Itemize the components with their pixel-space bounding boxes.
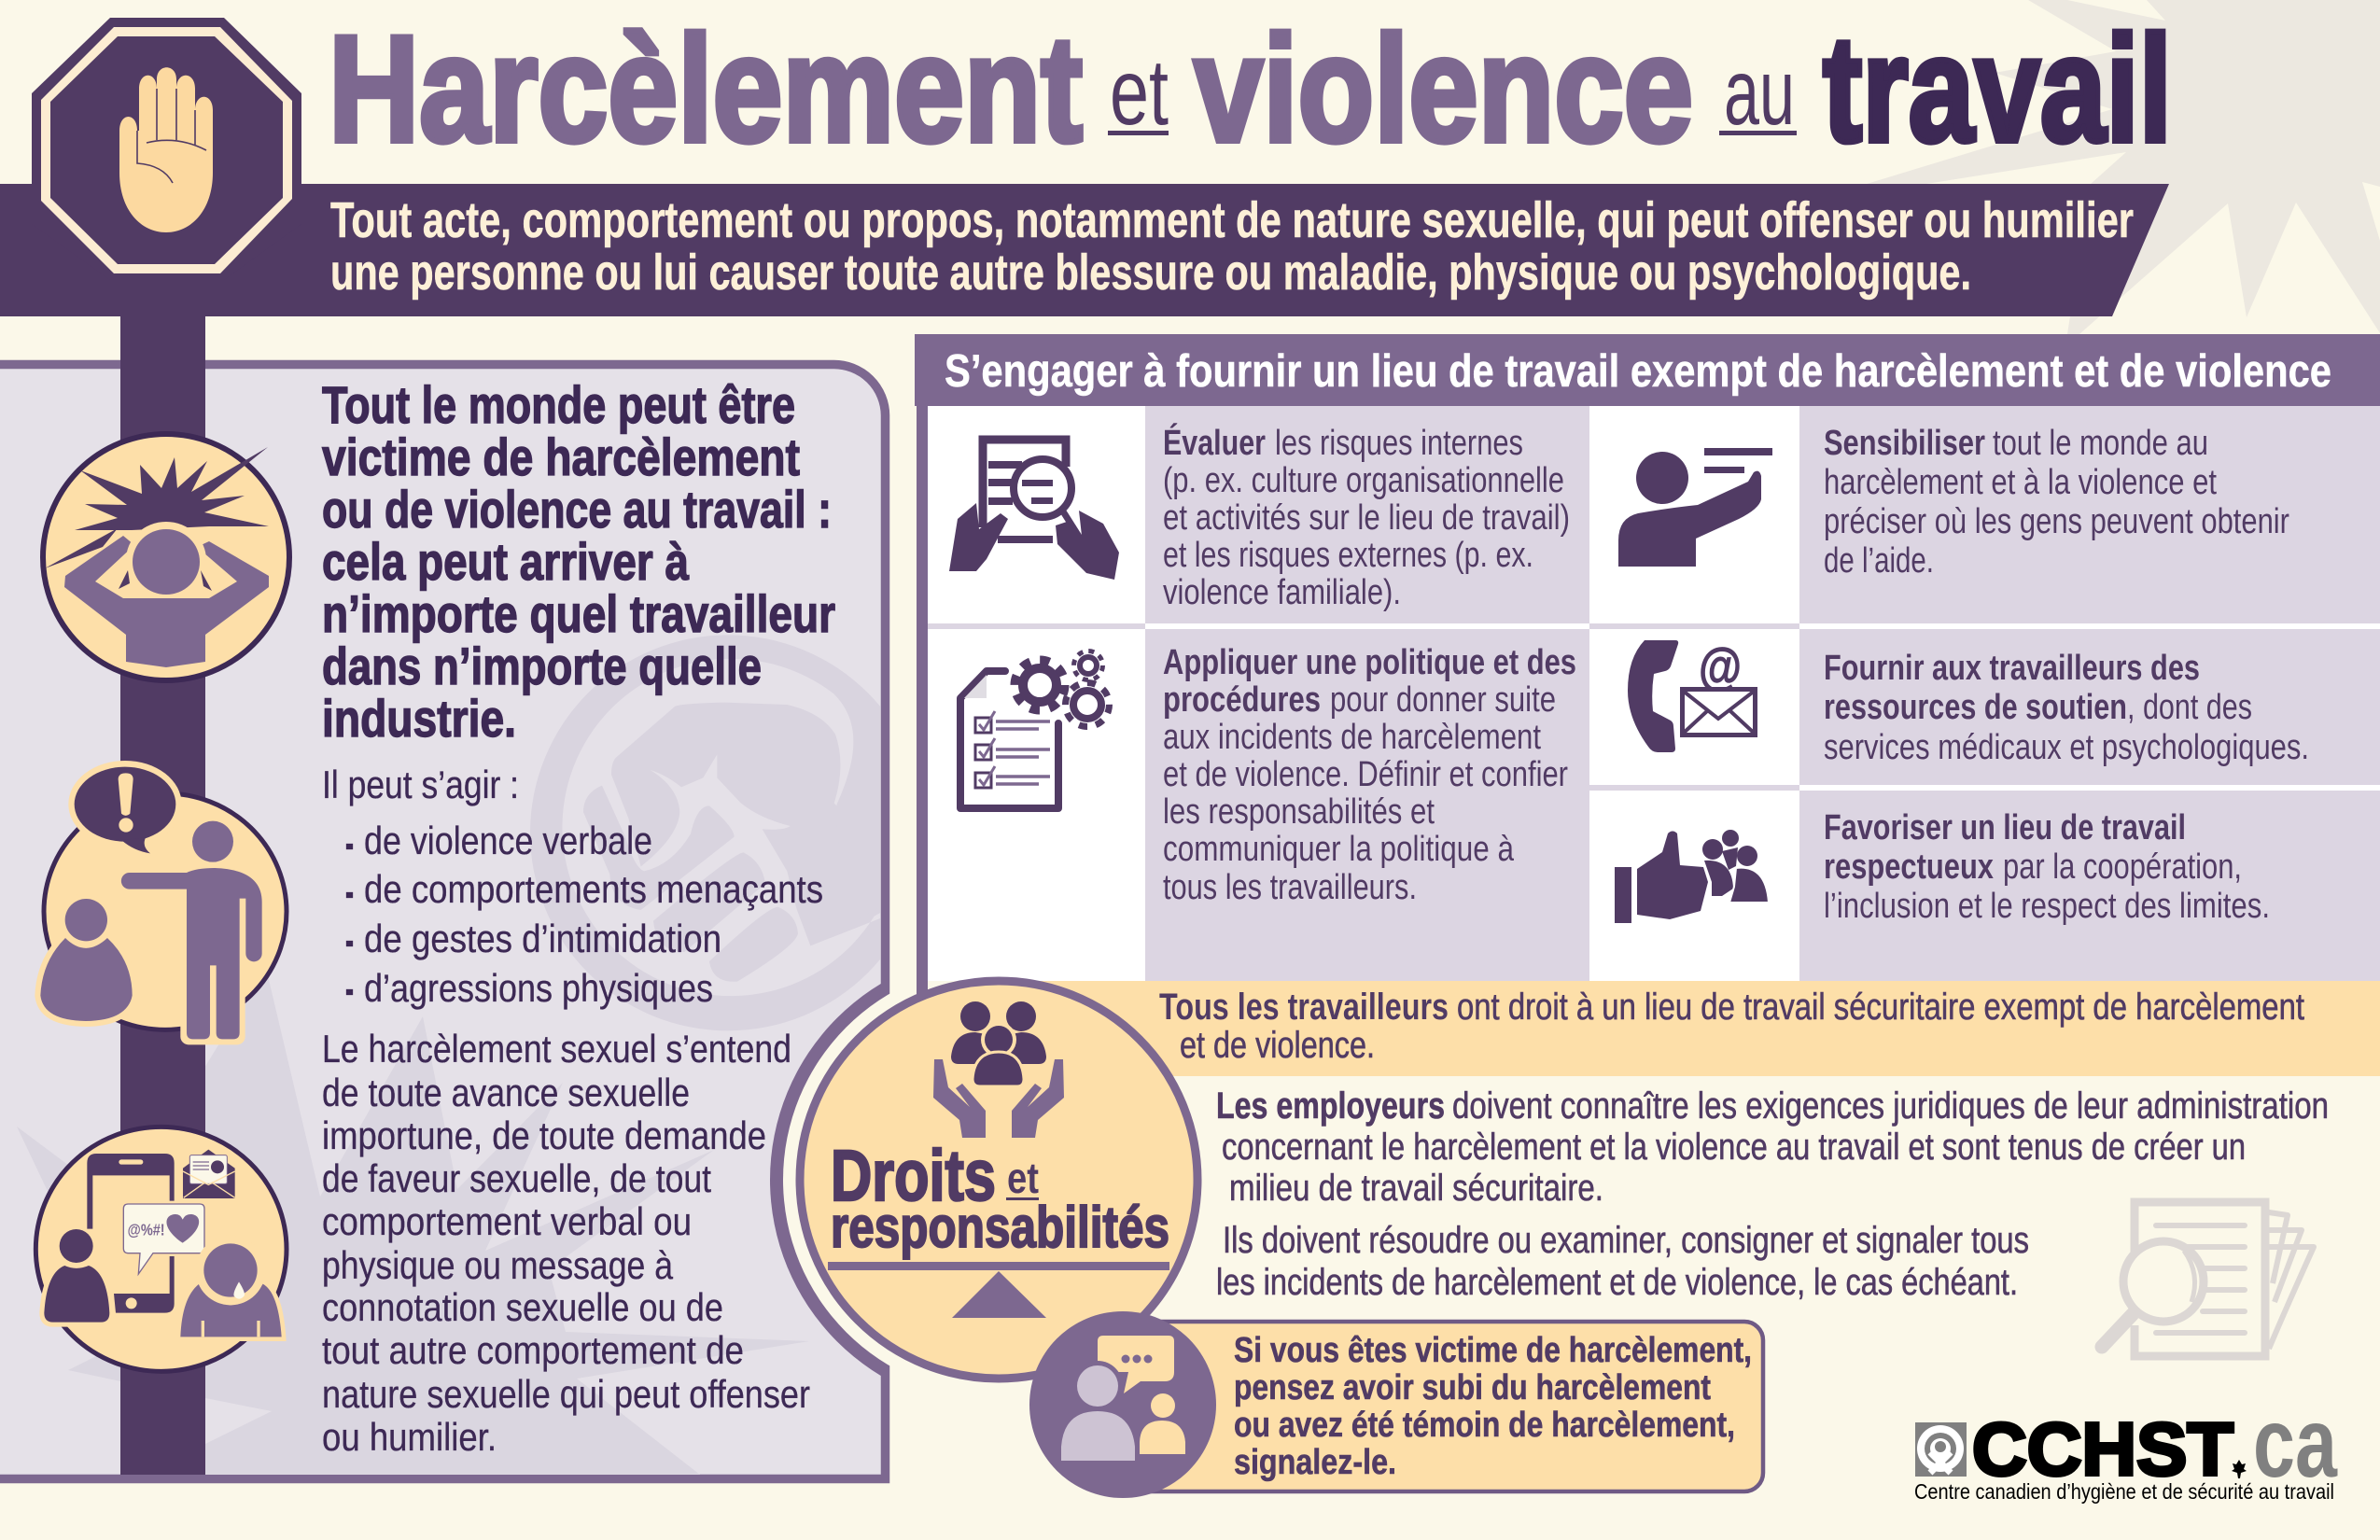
text: left panel heading: ou de violence au travail : bbox=[322, 480, 832, 539]
text: sexual harassment definition: ou humilier. bbox=[322, 1415, 497, 1459]
watermark: fist in circle bbox=[530, 635, 880, 1030]
section left border bbox=[917, 401, 928, 999]
text: favoriser: l’inclusion et le respect des limites. bbox=[1824, 887, 2270, 926]
text: fournir bbox=[1824, 649, 2309, 767]
circle outer rings bbox=[770, 976, 1202, 1383]
icon: people in hands bbox=[933, 1001, 1064, 1138]
balance bar and triangle bbox=[828, 1262, 1169, 1318]
icon: phone, at sign and envelope: @ bbox=[1699, 637, 1742, 695]
logo: CCHST.ca bbox=[1914, 1388, 2338, 1504]
text: fournir: Fournir aux travailleurs des bbox=[1824, 649, 2200, 688]
text: sexual harassment definition: physique ou message à bbox=[322, 1243, 674, 1287]
panel background bbox=[0, 364, 885, 1479]
yellow band: workers' rights: et de violence. bbox=[1180, 1025, 1375, 1066]
background starburst top right bbox=[1867, 0, 2380, 334]
logo: CCHST.ca: CCHST bbox=[1972, 1407, 2233, 1491]
signpost column bbox=[120, 313, 205, 1475]
heading: droits et responsabilités: Droits bbox=[831, 1136, 996, 1216]
text: sexual harassment definition: de toute avance sexuelle bbox=[322, 1071, 690, 1114]
icon: thumbs up and people bbox=[1615, 830, 1769, 923]
text: évaluer: Évaluer bbox=[1163, 422, 1266, 463]
text: appliquer une politique: tous les travailleurs. bbox=[1163, 868, 1417, 907]
text: sensibiliser: harcèlement et à la violence et bbox=[1824, 463, 2217, 502]
text: left panel heading: cela peut arriver à bbox=[322, 532, 690, 591]
logo: CCHST.ca: ca bbox=[2253, 1388, 2338, 1498]
icon: stop sign with hand bbox=[32, 18, 301, 280]
icon: person pointing at text bbox=[1618, 448, 1772, 567]
text: left panel heading: Tout le monde peut être bbox=[322, 375, 795, 434]
banner with definition bbox=[0, 184, 2169, 316]
text: sexual harassment definition: nature sexuelle qui peut offenser bbox=[322, 1372, 810, 1416]
text: list of behaviours: de violence verbale bbox=[364, 819, 652, 862]
text: favoriser: respectueux bbox=[1824, 847, 1994, 887]
text: fournir: ressources de soutien bbox=[1824, 688, 2127, 727]
icon: grey document and magnifier bbox=[2102, 1202, 2314, 1356]
title bbox=[329, 5, 2172, 174]
icon: document and magnifier with hands bbox=[949, 440, 1119, 580]
icon: checklist and gears bbox=[960, 651, 1109, 808]
text: fournir: , dont des bbox=[2127, 688, 2252, 727]
text: sensibiliser bbox=[1824, 424, 2289, 581]
icon: maple leaf bbox=[2232, 1460, 2247, 1478]
callout: report harassment: signalez-le. bbox=[1234, 1443, 1396, 1482]
text: appliquer une politique bbox=[1163, 643, 1576, 907]
text: sensibiliser: de l’aide. bbox=[1824, 541, 1934, 581]
watermark: starburst bbox=[17, 968, 809, 1475]
text: évaluer: et activités sur le lieu de travail) bbox=[1163, 498, 1570, 538]
text: appliquer une politique: aux incidents de harcèlement bbox=[1163, 718, 1541, 757]
message bubble bbox=[123, 1204, 204, 1274]
text: évaluer: (p. ex. culture organisationnelle bbox=[1163, 461, 1564, 500]
heading: droits et responsabilités: et bbox=[1007, 1154, 1039, 1202]
text: list of behaviours: de gestes d’intimidation bbox=[364, 917, 721, 960]
text: appliquer une politique: et de violence. Définir et confier bbox=[1163, 755, 1568, 794]
text: left panel heading: victime de harcèlement bbox=[322, 427, 800, 486]
callout: report harassment: pensez avoir subi du harcèlement bbox=[1234, 1368, 1711, 1407]
text: left panel heading: industrie. bbox=[322, 689, 516, 748]
text: évaluer: et les risques externes (p. ex. bbox=[1163, 536, 1533, 575]
text: sensibiliser: Sensibiliser bbox=[1824, 424, 1985, 463]
text: left panel heading: n’importe quel travailleur bbox=[322, 584, 835, 643]
text: évaluer: violence familiale). bbox=[1163, 573, 1401, 612]
envelope with letter bbox=[183, 1150, 235, 1198]
phone bbox=[87, 1154, 175, 1313]
text: sexual harassment definition: tout autre comportement de bbox=[322, 1328, 744, 1372]
panel: who can be affected bbox=[0, 364, 926, 1479]
text: évaluer: les risques internes bbox=[1275, 424, 1523, 463]
text: favoriser bbox=[1824, 808, 2270, 926]
table cells bbox=[928, 406, 2380, 981]
text: sexual harassment definition: Le harcèlement sexuel s’entend bbox=[322, 1027, 791, 1071]
speech bubble with exclamation bbox=[68, 761, 182, 857]
text: appliquer une politique: les responsabilités et bbox=[1163, 792, 1435, 832]
icon: online harassment bbox=[35, 1127, 287, 1371]
title: au bbox=[1724, 40, 1795, 145]
icon: people talking bbox=[1029, 1311, 1216, 1498]
text: favoriser: Favoriser un lieu de travail bbox=[1824, 808, 2186, 847]
text: list of behaviours: d’agressions physiques bbox=[364, 966, 713, 1010]
text: list of behaviours bbox=[322, 763, 823, 1010]
yellow band: workers' rights bbox=[999, 981, 2380, 1076]
icon: person in distress bbox=[43, 434, 289, 680]
text: appliquer une politique: procédures bbox=[1163, 680, 1321, 720]
text: sexual harassment definition: importune, de toute demande bbox=[322, 1113, 766, 1157]
title: et bbox=[1110, 40, 1169, 145]
person left bbox=[44, 1229, 109, 1323]
callout: report harassment bbox=[1120, 1322, 1763, 1491]
logo mark bbox=[1915, 1422, 1967, 1477]
text: sexual harassment definition: comportement verbal ou bbox=[322, 1199, 692, 1243]
text: évaluer bbox=[1163, 422, 1570, 612]
callout: report harassment: ou avez été témoin de harcèlement, bbox=[1234, 1406, 1735, 1445]
yellow band: workers' rights: Tous les travailleurs bbox=[1159, 987, 1449, 1028]
text: appliquer une politique: pour donner suite bbox=[1330, 680, 1556, 720]
right section: commitment table bbox=[915, 334, 2380, 999]
heading: droits et responsabilités: responsabilités bbox=[831, 1196, 1169, 1260]
title: violence bbox=[1194, 5, 1693, 174]
header bar bbox=[915, 334, 2380, 406]
text: sexual harassment definition: de faveur sexuelle, de tout bbox=[322, 1156, 711, 1200]
text: list of behaviours: de comportements menaçants bbox=[364, 867, 823, 911]
callout: report harassment: Si vous êtes victime de harcèlement, bbox=[1234, 1331, 1752, 1370]
text: appliquer une politique: Appliquer une politique et des bbox=[1163, 643, 1576, 682]
text: sensibiliser: préciser où les gens peuvent obtenir bbox=[1824, 502, 2289, 541]
icon: person yelling at another bbox=[40, 761, 287, 1044]
text: employers' responsibilities: milieu de travail sécuritaire. bbox=[1229, 1168, 1603, 1209]
text: employers' responsibilities: les incidents de harcèlement et de violence, le cas échéant. bbox=[1216, 1262, 2018, 1303]
icon: hand bbox=[119, 67, 213, 232]
icon: phone, at sign and envelope bbox=[1628, 637, 1755, 752]
text: sensibiliser: tout le monde au bbox=[1993, 424, 2208, 463]
text: left panel heading: dans n’importe quelle bbox=[322, 637, 762, 695]
text: sexual harassment definition bbox=[322, 1027, 810, 1459]
message bubble: @%#! bbox=[128, 1220, 165, 1239]
circle: droits et responsabilités bbox=[770, 976, 1202, 1383]
text: employers' responsibilities: Ils doivent résoudre ou examiner, consigner et signaler tous bbox=[1223, 1220, 2029, 1261]
text: favoriser: par la coopération, bbox=[2003, 847, 2242, 887]
person right crying bbox=[180, 1236, 282, 1337]
heading: droits et responsabilités bbox=[831, 1136, 1169, 1260]
title: Harcèlement bbox=[329, 5, 1083, 174]
text: employers' responsibilities bbox=[1216, 1085, 2329, 1303]
text: left panel heading bbox=[322, 375, 835, 748]
text: employers' responsibilities: Les employeurs bbox=[1216, 1085, 1445, 1127]
title: travail bbox=[1823, 5, 2172, 174]
text: sexual harassment definition: connotation sexuelle ou de bbox=[322, 1285, 723, 1329]
text: appliquer une politique: communiquer la politique à bbox=[1163, 830, 1515, 869]
text: list of behaviours: Il peut s’agir : bbox=[322, 763, 519, 806]
